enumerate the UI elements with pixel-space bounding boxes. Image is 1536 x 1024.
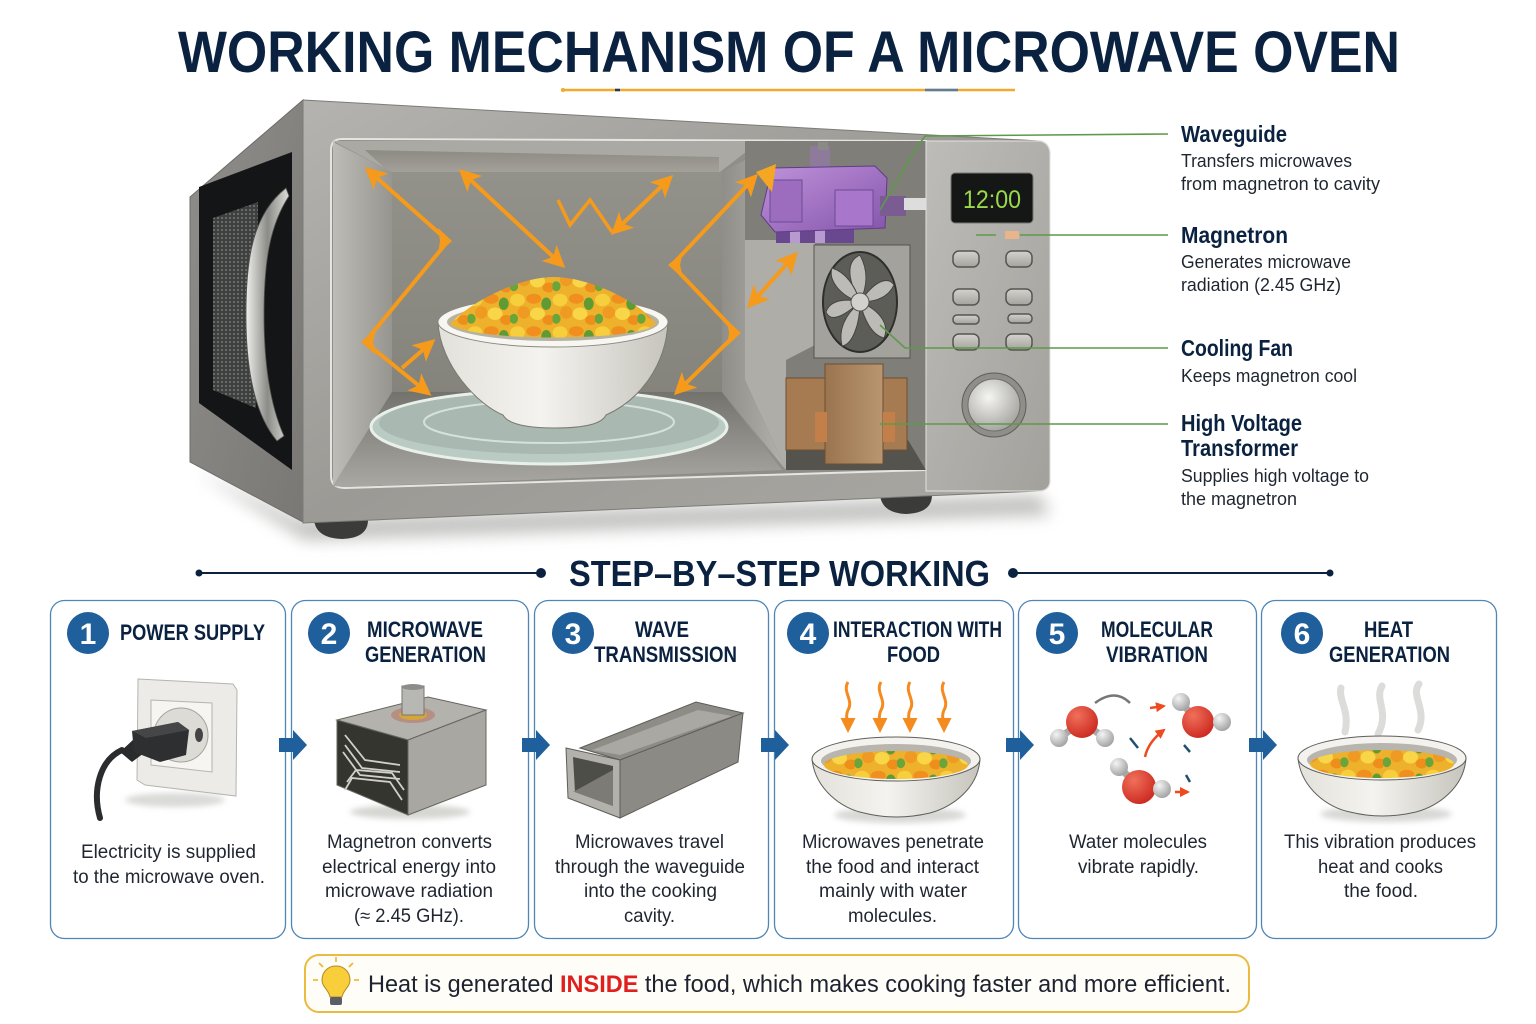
description: heat and cooks bbox=[1318, 857, 1443, 878]
leader lines bbox=[880, 134, 1168, 424]
heading bbox=[1329, 617, 1450, 667]
arrow 5 to 6 bbox=[1249, 730, 1277, 760]
component compartment bbox=[745, 141, 926, 470]
description: to the microwave oven. bbox=[73, 867, 265, 888]
step number 1: 1 bbox=[80, 618, 96, 651]
panel: step 6 heat generation bbox=[1262, 600, 1496, 938]
label: waveguide bbox=[1181, 121, 1380, 194]
step number 3: 3 bbox=[565, 618, 581, 651]
buttons bbox=[953, 251, 1032, 350]
icon: steaming bowl bbox=[1298, 684, 1466, 822]
heading bbox=[833, 617, 1002, 667]
label: waveguide: Waveguide bbox=[1181, 121, 1287, 147]
digital display: 12:00 bbox=[963, 186, 1021, 214]
description: (≈ 2.45 GHz). bbox=[354, 906, 464, 927]
panel: step 5 molecular vibration bbox=[1018, 600, 1256, 938]
digital display bbox=[951, 173, 1033, 223]
control panel bbox=[926, 141, 1050, 491]
cooling fan bbox=[814, 245, 910, 358]
heading: TRANSMISSION bbox=[594, 642, 737, 667]
icon: light bulb bbox=[313, 957, 359, 1005]
description: vibrate rapidly. bbox=[1078, 857, 1199, 878]
description: into the cooking bbox=[584, 881, 717, 902]
icon: magnetron block bbox=[337, 684, 486, 819]
description: electrical energy into bbox=[322, 857, 496, 878]
callout bbox=[305, 955, 1249, 1012]
magnetron bbox=[756, 142, 926, 243]
step number 5 bbox=[1036, 612, 1078, 654]
step number 6: 6 bbox=[1294, 618, 1310, 651]
description: Microwaves travel bbox=[575, 832, 724, 853]
panel: step 4 interaction with food bbox=[774, 600, 1014, 938]
heading: HEAT bbox=[1364, 617, 1413, 642]
description bbox=[322, 832, 496, 927]
description: cavity. bbox=[624, 906, 675, 927]
oven feet bbox=[314, 495, 932, 539]
oven door side bbox=[190, 100, 303, 522]
glass turntable bbox=[371, 390, 727, 464]
arrow 3 to 4 bbox=[761, 730, 789, 760]
label: high voltage transformer: the magnetron bbox=[1181, 489, 1297, 509]
oven front frame bbox=[303, 100, 1050, 523]
ground shadow bbox=[195, 470, 1050, 540]
description: Electricity is supplied bbox=[81, 842, 256, 863]
title underline bbox=[561, 88, 1015, 92]
description: This vibration produces bbox=[1284, 832, 1476, 853]
arrow 4 to 5 bbox=[1006, 730, 1034, 760]
label: cooling fan: Cooling Fan bbox=[1181, 335, 1293, 361]
label: magnetron: Magnetron bbox=[1181, 222, 1288, 248]
label: high voltage transformer: High Voltage bbox=[1181, 410, 1302, 436]
heading bbox=[365, 617, 486, 667]
icon: water molecules bbox=[1050, 693, 1231, 804]
description: Magnetron converts bbox=[327, 832, 492, 853]
icon: wavy arrows into bowl bbox=[812, 682, 980, 823]
step number 6 bbox=[1281, 612, 1323, 654]
label: high voltage transformer: Supplies high voltage to bbox=[1181, 466, 1369, 486]
label: waveguide: from magnetron to cavity bbox=[1181, 174, 1380, 194]
label: cooling fan bbox=[1181, 335, 1357, 386]
description bbox=[555, 832, 745, 927]
label: magnetron: radiation (2.45 GHz) bbox=[1181, 275, 1341, 295]
label: cooling fan: Keeps magnetron cool bbox=[1181, 366, 1357, 386]
step number 3 bbox=[552, 612, 594, 654]
heading: FOOD bbox=[887, 642, 940, 667]
heading bbox=[1101, 617, 1213, 667]
description: Water molecules bbox=[1069, 832, 1207, 853]
heading bbox=[594, 617, 737, 667]
description: the food and interact bbox=[806, 857, 980, 878]
description bbox=[1284, 832, 1476, 902]
heading: POWER SUPPLY bbox=[120, 620, 265, 645]
heading: VIBRATION bbox=[1106, 642, 1208, 667]
heading: GENERATION bbox=[365, 642, 486, 667]
step number 4 bbox=[787, 612, 829, 654]
cooking cavity bbox=[331, 139, 926, 488]
description bbox=[73, 842, 265, 888]
microwave reflection arrows bbox=[361, 170, 795, 393]
food bowl bbox=[438, 277, 668, 428]
icon: wall socket and plug bbox=[97, 679, 237, 818]
step number 4: 4 bbox=[800, 618, 817, 651]
panel: step 1 power supply bbox=[50, 600, 286, 938]
step number 2: 2 bbox=[321, 618, 337, 651]
section heading bbox=[196, 553, 1334, 594]
description: Microwaves penetrate bbox=[802, 832, 984, 853]
step number 5: 5 bbox=[1049, 618, 1065, 651]
high voltage transformer bbox=[786, 364, 907, 464]
description bbox=[802, 832, 984, 927]
arrow 1 to 2 bbox=[279, 730, 307, 760]
step number 1 bbox=[67, 612, 109, 654]
description: the food. bbox=[1344, 881, 1418, 902]
heading: INTERACTION WITH bbox=[833, 617, 1002, 642]
title: WORKING MECHANISM OF A MICROWAVE OVEN bbox=[178, 20, 1400, 85]
description: molecules. bbox=[848, 906, 937, 927]
corner chevrons bbox=[361, 228, 741, 355]
description: microwave radiation bbox=[325, 881, 493, 902]
description: mainly with water bbox=[819, 881, 968, 902]
label: high voltage transformer: Transformer bbox=[1181, 435, 1298, 461]
heading: WAVE bbox=[635, 617, 689, 642]
dial knob bbox=[962, 373, 1026, 437]
label: high voltage transformer bbox=[1181, 410, 1369, 509]
label: waveguide: Transfers microwaves bbox=[1181, 151, 1352, 171]
step number 2 bbox=[308, 612, 350, 654]
label: magnetron: Generates microwave bbox=[1181, 252, 1351, 272]
microwave oven illustration bbox=[190, 100, 1168, 540]
icon: waveguide tube bbox=[566, 702, 743, 818]
description: through the waveguide bbox=[555, 857, 745, 878]
section heading: STEP–BY–STEP WORKING bbox=[569, 553, 990, 594]
label: magnetron bbox=[1181, 222, 1351, 295]
arrow 2 to 3 bbox=[522, 730, 550, 760]
heading: MOLECULAR bbox=[1101, 617, 1213, 642]
callout text: Heat is generated INSIDE the food, which makes cooking faster and more efficient. bbox=[368, 971, 1231, 998]
panel: step 3 wave transmission bbox=[534, 600, 768, 938]
description bbox=[1069, 832, 1207, 878]
heading: MICROWAVE bbox=[367, 617, 483, 642]
heading: GENERATION bbox=[1329, 642, 1450, 667]
panel: step 2 microwave generation bbox=[292, 600, 528, 938]
